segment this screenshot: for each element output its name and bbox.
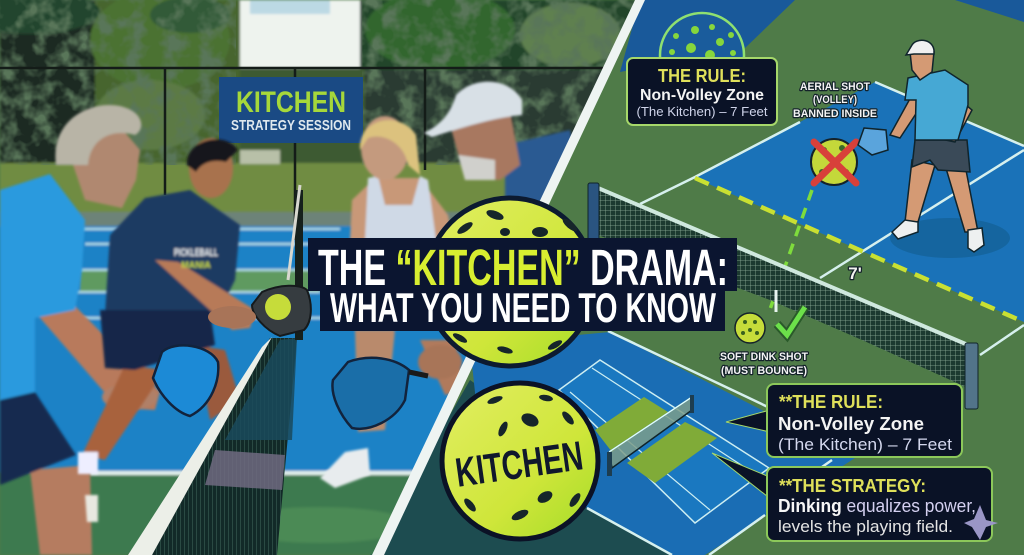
upper court blue [695,82,1024,322]
icon: soft dink ball [735,313,765,343]
banner: kitchen strategy session: KITCHEN [236,86,346,119]
label: aerial shot: AERIAL SHOT [800,81,870,93]
label: soft dink shot: (MUST BOUNCE) [721,365,807,377]
paddle [858,128,888,155]
icon: top ball outline [658,12,746,57]
kitchen dashed line [695,178,1024,322]
shot path [768,190,812,315]
player: older man with white cap [423,80,572,201]
icon: green check mark [777,307,805,335]
divider: white diagonal stripe [372,0,645,555]
head [910,52,934,80]
panel: left photo of players [0,0,660,555]
pavement strip [0,210,461,228]
shoes [892,220,918,239]
fence top rail and posts [0,68,620,240]
legs [905,160,935,222]
callout: the rule lower [726,384,962,457]
label: aerial shot: (VOLLEY) [813,94,857,106]
banner: kitchen strategy session [219,77,363,143]
net: foreground net with white tape [128,185,303,555]
chart: mini court diagram [559,360,769,523]
lower court lines [587,331,832,555]
player: young man in navy [78,138,255,522]
label: soft dink shot: SOFT DINK SHOT [720,351,808,363]
callout: the rule top: THE RULE: [658,66,746,86]
label: aerial shot [793,81,877,120]
player: young man in navy: PICKLEBALL [174,247,218,259]
shorts [912,140,970,172]
arms [890,95,925,138]
label: soft dink shot [720,351,808,377]
callout: the rule top: (The Kitchen) – 7 Feet [636,104,768,119]
callout: the strategy: **THE STRATEGY: [779,476,926,496]
paddle: dark blue paddle held by woman [332,358,428,429]
callout: the rule top: Non-Volley Zone [640,87,764,104]
callout: the strategy: Dinking equalizes power, [778,496,976,516]
foliage texture left [0,0,236,165]
icon: large pickleball behind title [426,198,594,366]
callout: the rule lower: (The Kitchen) – 7 Feet [778,436,952,454]
paddle: blue paddle held by left man [153,345,218,416]
callout: the rule top [627,58,777,125]
dark top blue wedge [620,0,795,72]
shadow under player [890,218,1010,258]
upper court lines [640,82,1024,355]
label: aerial shot: BANNED INSIDE [793,108,877,120]
player: young man in navy: MANIA [181,260,211,270]
icon: large net right [588,183,978,409]
player: man in light blue [0,105,160,555]
trees [94,0,242,164]
icon: sparkle [964,505,998,540]
lower court blue [470,332,855,555]
callout: the strategy [712,453,998,541]
icon: kitchen pickleball [442,383,598,539]
icon: banned volley ball [811,139,857,185]
title block [308,238,737,331]
grass [0,161,506,213]
banner: kitchen strategy session: STRATEGY SESSION [231,117,351,134]
mini net [609,397,692,468]
foliage texture right [362,0,652,165]
shirt [905,70,968,140]
label: 7 foot: 7' [848,264,862,283]
callout: the strategy: levels the playing field. [778,518,953,536]
lower left teal area [370,380,700,555]
callout: the rule lower: **THE RULE: [779,392,883,412]
title line one: THE “KITCHEN” DRAMA: [318,239,728,296]
player: woman in white tank [320,116,465,488]
kitchen zones [595,397,668,452]
callout: the rule lower: Non-Volley Zone [778,414,924,434]
sky [238,0,362,70]
icon: kitchen pickleball: KITCHEN [453,432,586,496]
title line two: WHAT YOU NEED TO KNOW [330,284,716,331]
court [0,224,466,474]
paddle: paddle with pickleball [208,286,311,336]
player: illustrated player with paddle [858,40,984,252]
